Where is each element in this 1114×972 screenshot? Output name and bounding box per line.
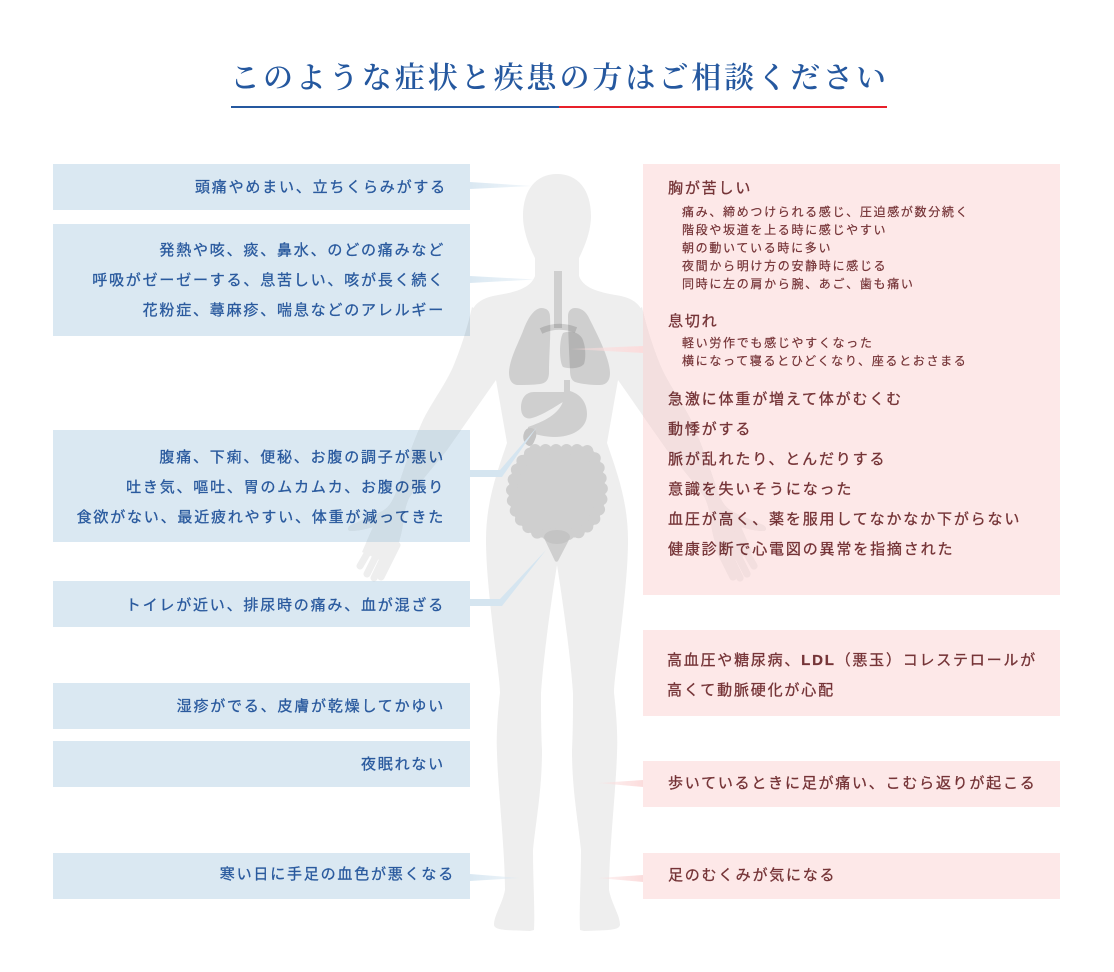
title: このような症状と疾患の方はご相談ください [230, 62, 889, 95]
panel: cold extremities [53, 853, 470, 899]
organ: bronchi [541, 327, 576, 331]
panel: sleep symptoms [53, 741, 470, 787]
panel: cholesterol: 高くて動脈硬化が心配 [667, 682, 835, 699]
organ: liver [521, 392, 570, 418]
panel: heart symptoms: 階段や坂道を上る時に感じやすい [682, 223, 887, 237]
panel: heart symptoms: 痛み、締めつけられる感じ、圧迫感が数分続く [682, 205, 969, 219]
organ: heart [560, 332, 585, 368]
pointer: heart [570, 346, 643, 353]
pointer: calf [598, 780, 643, 787]
panel: heart symptoms: 同時に左の肩から腕、あご、歯も痛い [682, 277, 915, 291]
panel: digestive symptoms [53, 430, 470, 542]
panel: digestive symptoms: 食欲がない、最近疲れやすい、体重が減ってきた [77, 509, 445, 526]
body illustration [348, 174, 766, 931]
organ: right lung [568, 308, 610, 385]
panel: heart symptoms [643, 164, 1060, 595]
panel: heart symptoms: 脈が乱れたり、とんだりする [668, 451, 886, 468]
panel: head symptoms: 頭痛やめまい、立ちくらみがする [195, 179, 447, 196]
organ: stomach [528, 380, 587, 437]
organ: trachea [554, 271, 562, 328]
organ: left lung [509, 308, 550, 385]
panel: cholesterol [643, 630, 1060, 716]
panel: heart symptoms: 意識を失いそうになった [668, 481, 853, 498]
panel: heart symptoms: 夜間から明け方の安静時に感じる [682, 259, 887, 273]
panel: heart symptoms: 急激に体重が増えて体がむくむ [668, 391, 903, 408]
organ: bladder [544, 530, 570, 562]
panel: heart symptoms: 横になって寝るとひどくなり、座るとおさまる [682, 354, 967, 368]
panel: digestive symptoms: 腹痛、下痢、便秘、お腹の調子が悪い [159, 449, 445, 466]
pointer: ankle [598, 875, 643, 882]
panel: skin symptoms: 湿疹がでる、皮膚が乾燥してかゆい [177, 698, 445, 715]
torso, head and legs [470, 174, 644, 931]
panel: heart symptoms: 朝の動いている時に多い [682, 241, 832, 255]
panel: urinary symptoms: トイレが近い、排尿時の痛み、血が混ざる [126, 597, 445, 614]
human silhouette [348, 174, 766, 931]
panel: cold extremities: 寒い日に手足の血色が悪くなる [220, 866, 455, 883]
panel: skin symptoms [53, 683, 470, 729]
organ: duodenum [523, 428, 536, 446]
panel: leg pain [643, 761, 1060, 807]
pointer: feet left [470, 874, 520, 881]
panel: heart symptoms: 息切れ [668, 313, 719, 330]
title underline [231, 106, 887, 108]
panel: respiratory symptoms: 花粉症、蕁麻疹、喘息などのアレルギー [143, 302, 445, 319]
panel: respiratory symptoms: 発熱や咳、痰、鼻水、のどの痛みなど [159, 242, 445, 259]
pointer: head [470, 182, 532, 189]
panel: heart symptoms: 胸が苦しい [668, 180, 752, 197]
panel: leg pain: 歩いているときに足が痛い、こむら返りが起こる [668, 775, 1036, 792]
pointer: abdomen [470, 427, 537, 477]
panel: digestive symptoms: 吐き気、嘔吐、胃のムカムカ、お腹の張り [126, 479, 445, 496]
panel: heart symptoms: 健康診断で心電図の異常を指摘された [668, 541, 954, 558]
panel: urinary symptoms [53, 581, 470, 627]
panel: leg swelling [643, 853, 1060, 899]
right arm and hand [618, 307, 766, 578]
panel: heart symptoms: 軽い労作でも感じやすくなった [682, 336, 874, 350]
left arm and hand [348, 307, 496, 578]
panel: head symptoms [53, 164, 470, 210]
pointer: bladder [470, 550, 546, 606]
panel: respiratory symptoms: 呼吸がゼーゼーする、息苦しい、咳が長く続く [92, 272, 445, 289]
panel: leg swelling: 足のむくみが気になる [668, 867, 836, 884]
panel: respiratory symptoms [53, 224, 470, 336]
pointer: chest [470, 276, 535, 283]
organ: intestines [512, 450, 602, 534]
panel: cholesterol: 高血圧や糖尿病、LDL（悪玉）コレステロールが [667, 652, 1037, 669]
panel: heart symptoms: 動悸がする [668, 421, 752, 438]
panel: sleep symptoms: 夜眠れない [361, 756, 445, 773]
panel: heart symptoms: 血圧が高く、薬を服用してなかなか下がらない [668, 511, 1021, 528]
